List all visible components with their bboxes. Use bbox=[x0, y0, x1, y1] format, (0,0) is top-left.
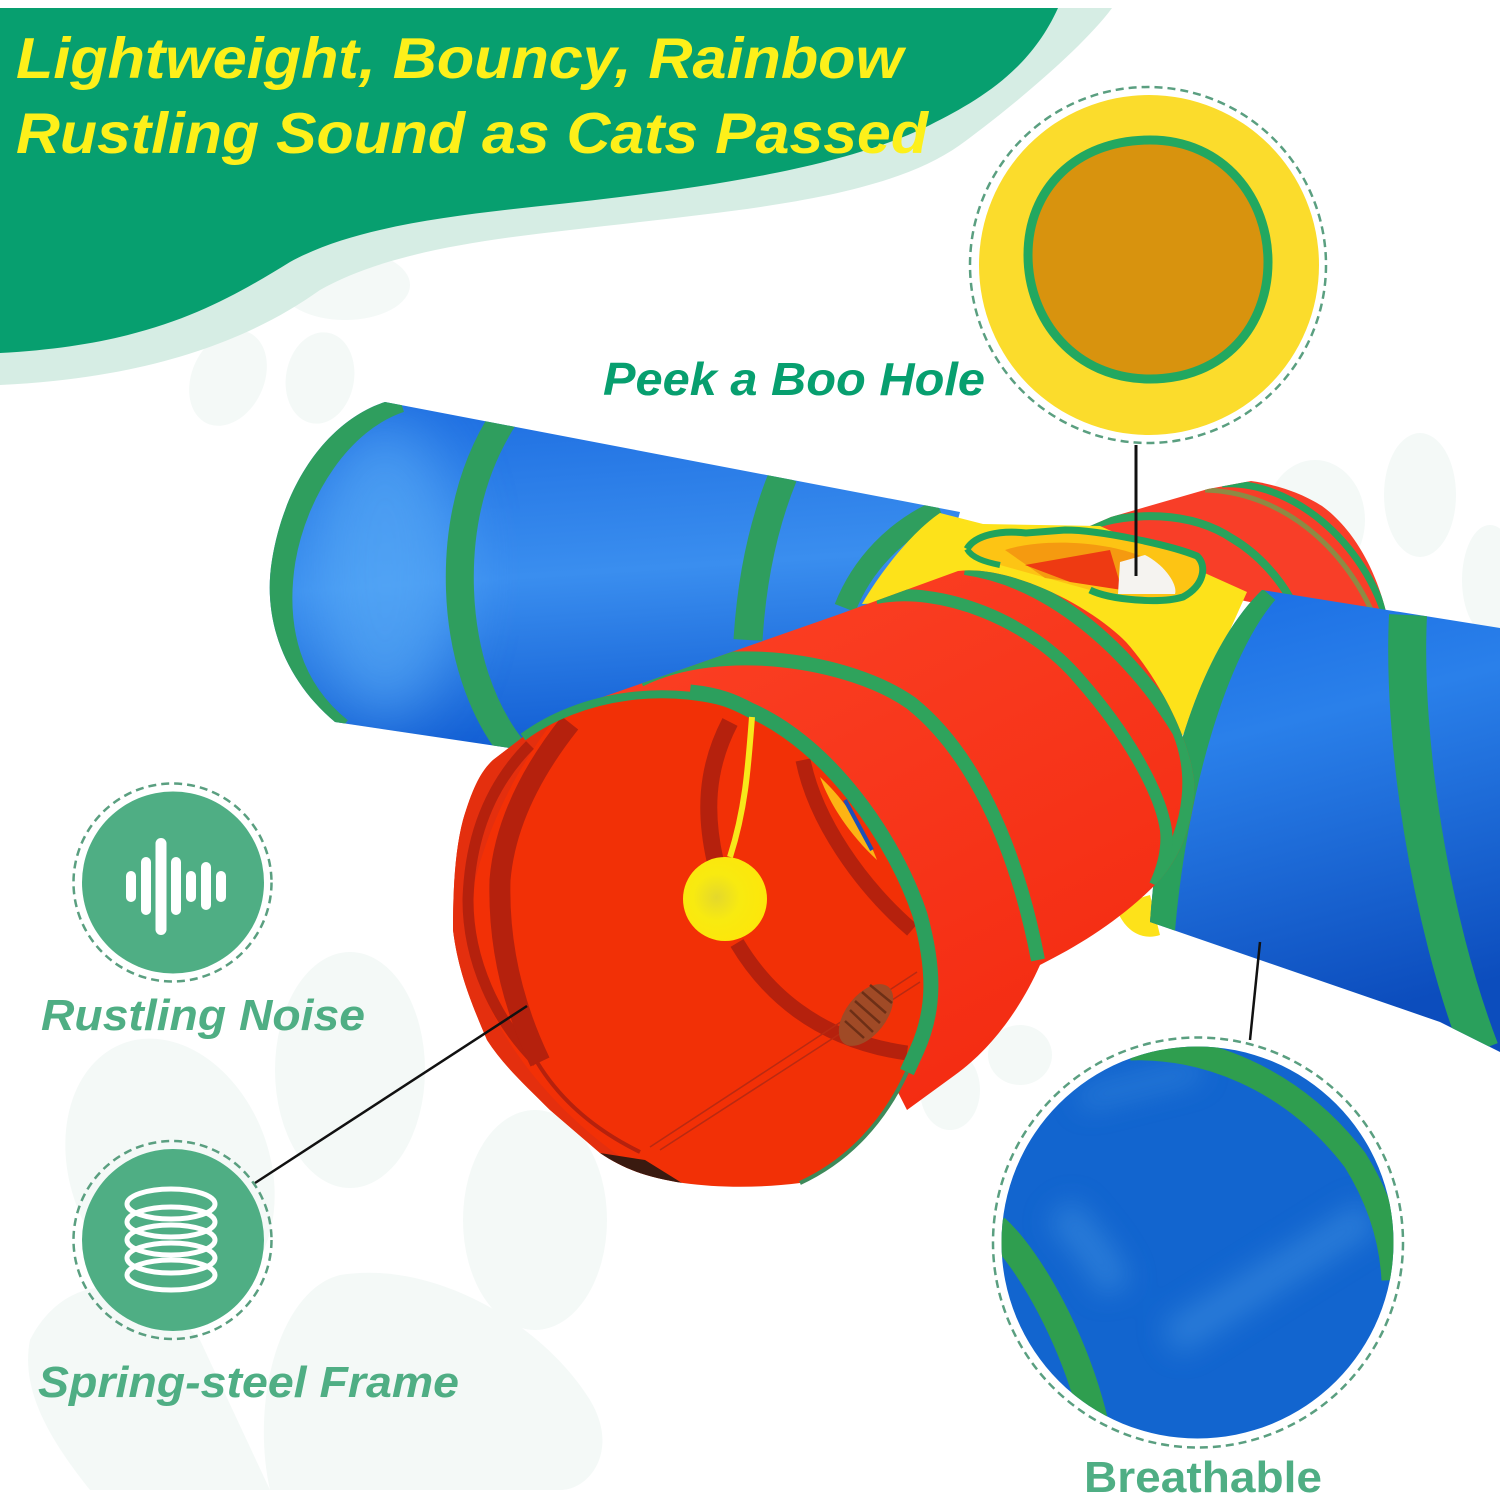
callout: breathable fabric swatch bbox=[993, 1038, 1403, 1448]
tunnel bbox=[270, 400, 1500, 1200]
back left blue tube bbox=[270, 400, 960, 780]
hanging string bbox=[730, 717, 752, 857]
title: Rustling Sound as Cats Passed bbox=[16, 102, 930, 166]
yellow pompom ball bbox=[683, 857, 767, 941]
tube mouth bbox=[430, 692, 931, 1200]
leader line: breathable bbox=[1250, 942, 1260, 1040]
label: Rustling Noise: Rustling Noise bbox=[41, 991, 365, 1040]
icon: spring coil bbox=[74, 1141, 272, 1339]
title: Lightweight, Bouncy, Rainbow bbox=[16, 27, 906, 91]
small spring toy bbox=[828, 974, 904, 1056]
label: Peek a Boo Hole: Peek a Boo Hole bbox=[603, 353, 985, 405]
far tunnel glimpse bbox=[820, 777, 877, 860]
icon: sound wave bbox=[74, 784, 272, 982]
front right blue tube bbox=[1150, 590, 1500, 1052]
back right red tube bbox=[1090, 481, 1386, 610]
callout: peek a boo hole bbox=[970, 87, 1326, 443]
front red tube body bbox=[560, 568, 1194, 1110]
inner dark frame rings bbox=[468, 722, 912, 1152]
centre yellow junction bbox=[862, 513, 1247, 937]
leader line: spring-steel frame bbox=[255, 1006, 527, 1183]
peek hole in tunnel bbox=[967, 530, 1203, 601]
label: Spring-steel Frame: Spring-steel Frame bbox=[38, 1358, 459, 1407]
header banner bbox=[0, 8, 1112, 385]
title bbox=[16, 27, 930, 166]
leader line: peek a boo bbox=[1134, 445, 1138, 576]
